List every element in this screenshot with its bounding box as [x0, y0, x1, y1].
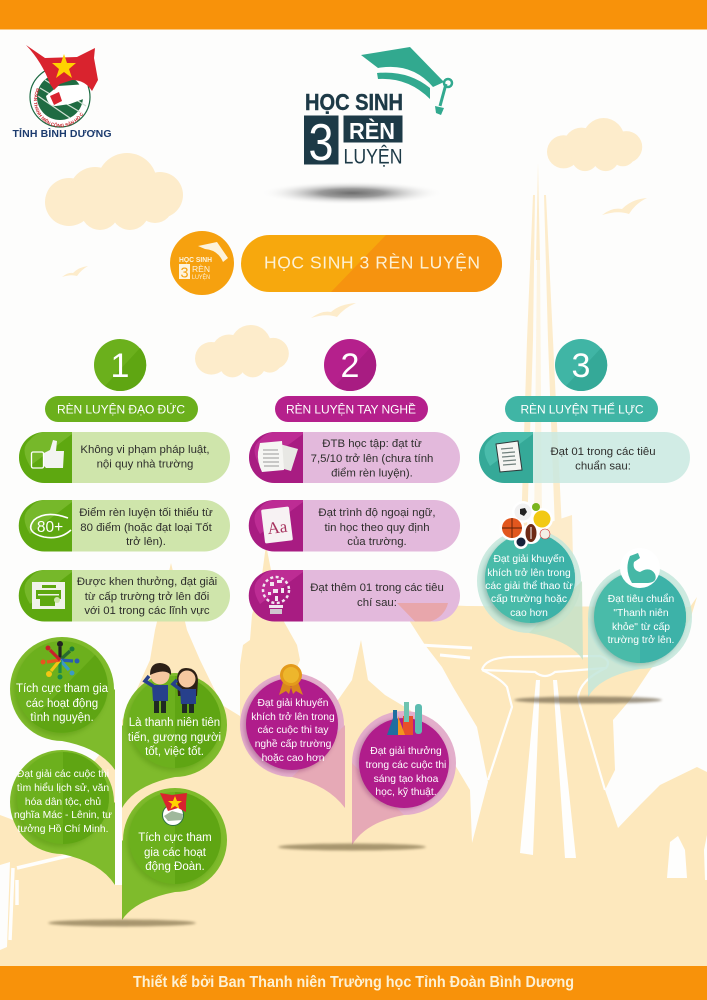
bubble: thể thao: khích trở lên trong — [487, 567, 571, 579]
bubble: tay nghề: nghề cấp trường — [255, 738, 332, 750]
item: khen thưởng — [19, 570, 230, 622]
bubble: cuộc thi tìm hiểu lịch sử: hóa dân tộc, chủ — [25, 796, 101, 808]
icon: 80+ — [31, 514, 71, 538]
item: khen thưởng: Được khen thưởng, đạt giải — [77, 576, 217, 588]
item: ĐTB học tập — [249, 432, 460, 483]
item: điểm rèn luyện: 80 điểm (hoặc đạt loại Tốt — [80, 522, 213, 534]
header badge icon: RÈN — [192, 265, 210, 274]
label: rèn luyện đạo đức — [45, 396, 198, 422]
label: rèn luyện tay nghề — [275, 396, 428, 422]
bubble: cuộc thi tìm hiểu lịch sử: tìm hiểu lịch sử, văn — [17, 782, 109, 794]
bubble: tình nguyện: các hoạt động — [26, 698, 98, 710]
bubble: thanh niên khỏe: khỏe" từ cấp — [612, 621, 670, 633]
top orange bar — [0, 0, 707, 30]
icon: thumbs up — [32, 440, 64, 468]
bubble: thanh niên tiên tiến: Là thanh niên tiên — [129, 717, 220, 729]
item: điểm rèn luyện: trở lên). — [126, 536, 166, 548]
item: khen thưởng: từ cấp trường trở lên đối — [85, 591, 209, 603]
item: ngoại ngữ: tin học theo quy định — [324, 522, 430, 534]
item: ĐTB học tập: điểm rèn luyện). — [331, 468, 413, 480]
bubble: tay nghề: Đạt giải khuyến — [258, 697, 329, 709]
number 1 — [94, 339, 146, 391]
bubble: cuộc thi tìm hiểu lịch sử: Đạt giải các cuộc thi — [17, 769, 109, 780]
bubble: tình nguyện: Tích cực tham gia — [16, 683, 109, 695]
item: tiêu chuẩn — [479, 432, 690, 483]
header badge icon: HỌC SINH — [179, 257, 212, 264]
bubble: thanh niên tiên tiến: tốt, việc tốt. — [145, 746, 204, 758]
bubble: thanh niên tiên tiến: tiến, gương người — [128, 732, 221, 744]
header pill — [241, 235, 502, 292]
item: ĐTB học tập: 7,5/10 trở lên (chưa tính — [311, 453, 433, 465]
item: tiêu chí: chí sau: — [357, 597, 397, 609]
bubble: sáng tạo khoa học: Đạt giải thưởng — [370, 745, 442, 757]
footer bar: Thiết kế bởi Ban Thanh niên Trường học Tỉnh Đoàn Bình Dương — [133, 974, 574, 991]
icon: muscle arm — [620, 548, 660, 588]
white temple outlines — [10, 645, 608, 940]
cloud centre — [195, 325, 289, 377]
icon: medal — [279, 664, 303, 695]
bubble: tay nghề: hoặc cao hơn — [262, 753, 325, 764]
bubble: thanh niên tiên tiến — [122, 663, 227, 808]
tower spire — [505, 163, 574, 608]
bubble: cuộc thi tìm hiểu lịch sử: tưởng Hồ Chí Minh. — [18, 823, 108, 835]
item: không vi phạm — [19, 432, 230, 483]
logo: Đoàn Thanh niên badge: TỈNH BÌNH DƯƠNG — [12, 127, 112, 140]
bubble: thanh niên khỏe — [588, 548, 692, 697]
ground shadow — [48, 920, 196, 926]
icon: idea bulb — [263, 577, 289, 614]
number 1: 1 — [111, 347, 129, 385]
bubble: thể thao: các giải thể thao từ — [485, 580, 573, 592]
item: ngoại ngữ: của trường. — [347, 536, 407, 548]
bubble: thanh niên khỏe: "Thanh niên — [613, 608, 669, 619]
bubble: sáng tạo khoa học — [352, 702, 456, 845]
label: rèn luyện tay nghề: RÈN LUYỆN TAY NGHỀ — [286, 402, 416, 416]
bubble: tình nguyện: tình nguyện. — [30, 712, 94, 724]
title logo: Học sinh 3 rèn luyện — [304, 47, 452, 172]
bird centre — [311, 303, 356, 318]
header badge icon: LUYỆN — [192, 272, 210, 281]
icon: printer — [32, 582, 65, 609]
bubble: tay nghề: khích trở lên trong — [251, 711, 335, 723]
icon: 80+: 80+ — [37, 519, 63, 536]
column 3: rèn luyện thể lực — [477, 339, 692, 704]
item: ngoại ngữ: Đạt trình độ ngoại ngữ, — [318, 507, 436, 519]
label: rèn luyện thể lực: RÈN LUYỆN THỂ LỰC — [520, 402, 644, 416]
bubble: thanh niên khỏe: Đạt tiêu chuẩn — [608, 593, 674, 605]
item: ngoại ngữ — [249, 500, 460, 552]
header pill: HỌC SINH 3 RÈN LUYỆN — [264, 252, 480, 272]
bubble: cuộc thi tìm hiểu lịch sử: nghĩa Mác - Lênin, tư — [14, 810, 112, 821]
bubble: cuộc thi tìm hiểu lịch sử — [10, 750, 115, 885]
title logo: Học sinh 3 rèn luyện: RÈN — [349, 117, 395, 144]
title logo: Học sinh 3 rèn luyện: LUYỆN — [344, 146, 402, 168]
cloud left — [45, 153, 183, 230]
icon: book Aa: Aa — [266, 517, 289, 538]
item: tiêu chuẩn: chuẩn sau: — [575, 460, 631, 472]
number 3: 3 — [572, 347, 590, 385]
ground shadow — [278, 844, 426, 850]
bubble: hoạt động đoàn — [122, 788, 227, 920]
icon: book Aa — [261, 506, 293, 544]
icon: sports balls — [500, 501, 553, 549]
bubble: sáng tạo khoa học: sáng tạo khoa — [374, 774, 439, 785]
item: điểm rèn luyện — [19, 500, 230, 552]
bubble: thể thao: Đạt giải khuyến — [494, 553, 565, 565]
title logo: Học sinh 3 rèn luyện: HỌC SINH — [305, 89, 403, 115]
bubble: sáng tạo khoa học: học, kỹ thuật. — [375, 787, 437, 798]
footer bar — [0, 966, 707, 1000]
title shadow — [260, 181, 444, 205]
bubble: tình nguyện — [10, 637, 115, 770]
item: tiêu chí: Đạt thêm 01 trong các tiêu — [310, 582, 444, 594]
header badge icon: 3 — [180, 264, 188, 282]
bubble: tay nghề — [240, 664, 345, 808]
bubble: hoạt động đoàn: Tích cực tham — [138, 832, 212, 844]
number 3 — [555, 339, 607, 391]
icon: two saluting students — [145, 663, 198, 713]
title logo: Học sinh 3 rèn luyện: 3 — [308, 114, 334, 172]
icon: small union badge — [160, 793, 187, 826]
number 2: 2 — [341, 347, 359, 385]
bubble: thể thao: cấp trường hoặc — [491, 593, 567, 605]
item: không vi phạm: nội quy nhà trường — [97, 458, 193, 470]
item: tiêu chí — [249, 570, 460, 622]
item: tiêu chuẩn: Đạt 01 trong các tiêu — [550, 446, 656, 458]
ground and temples — [0, 545, 707, 966]
item: ĐTB học tập: ĐTB học tập: đạt từ — [322, 438, 422, 450]
bubble: thanh niên khỏe: trường trở lên. — [608, 634, 674, 646]
white road lines — [115, 680, 707, 885]
icon: checklist — [496, 441, 522, 472]
bubble: thể thao — [477, 501, 583, 660]
label: rèn luyện thể lực — [505, 396, 658, 422]
logo: Đoàn Thanh niên badge — [12, 45, 112, 140]
icon: colourful ring of people — [40, 641, 80, 680]
bubble: thể thao: cao hơn — [510, 608, 548, 619]
bird left — [62, 266, 88, 277]
icon: graduation cap — [361, 47, 452, 115]
item: khen thưởng: với 01 trong các lĩnh vực — [84, 605, 210, 617]
column 1: rèn luyện đạo đức — [10, 339, 230, 926]
bubble: hoạt động đoàn: động Đoàn. — [145, 861, 205, 873]
header badge icon — [170, 231, 234, 295]
bubble: tay nghề: các cuộc thi tay — [258, 725, 329, 736]
cloud right — [547, 118, 642, 171]
icon: papers — [258, 441, 298, 472]
item: điểm rèn luyện: Điểm rèn luyện tối thiểu từ — [79, 507, 213, 519]
bird right — [602, 198, 647, 215]
label: rèn luyện đạo đức: RÈN LUYỆN ĐẠO ĐỨC — [57, 402, 185, 416]
bubble: sáng tạo khoa học: trong các cuộc thi — [366, 760, 446, 771]
column 2: rèn luyện tay nghề — [240, 339, 460, 850]
ground shadow — [514, 696, 662, 704]
icon: flasks — [387, 702, 422, 735]
bubble: hoạt động đoàn: gia các hoạt — [144, 847, 207, 859]
item: không vi phạm: Không vi phạm pháp luật, — [80, 444, 210, 456]
number 2 — [324, 339, 376, 391]
